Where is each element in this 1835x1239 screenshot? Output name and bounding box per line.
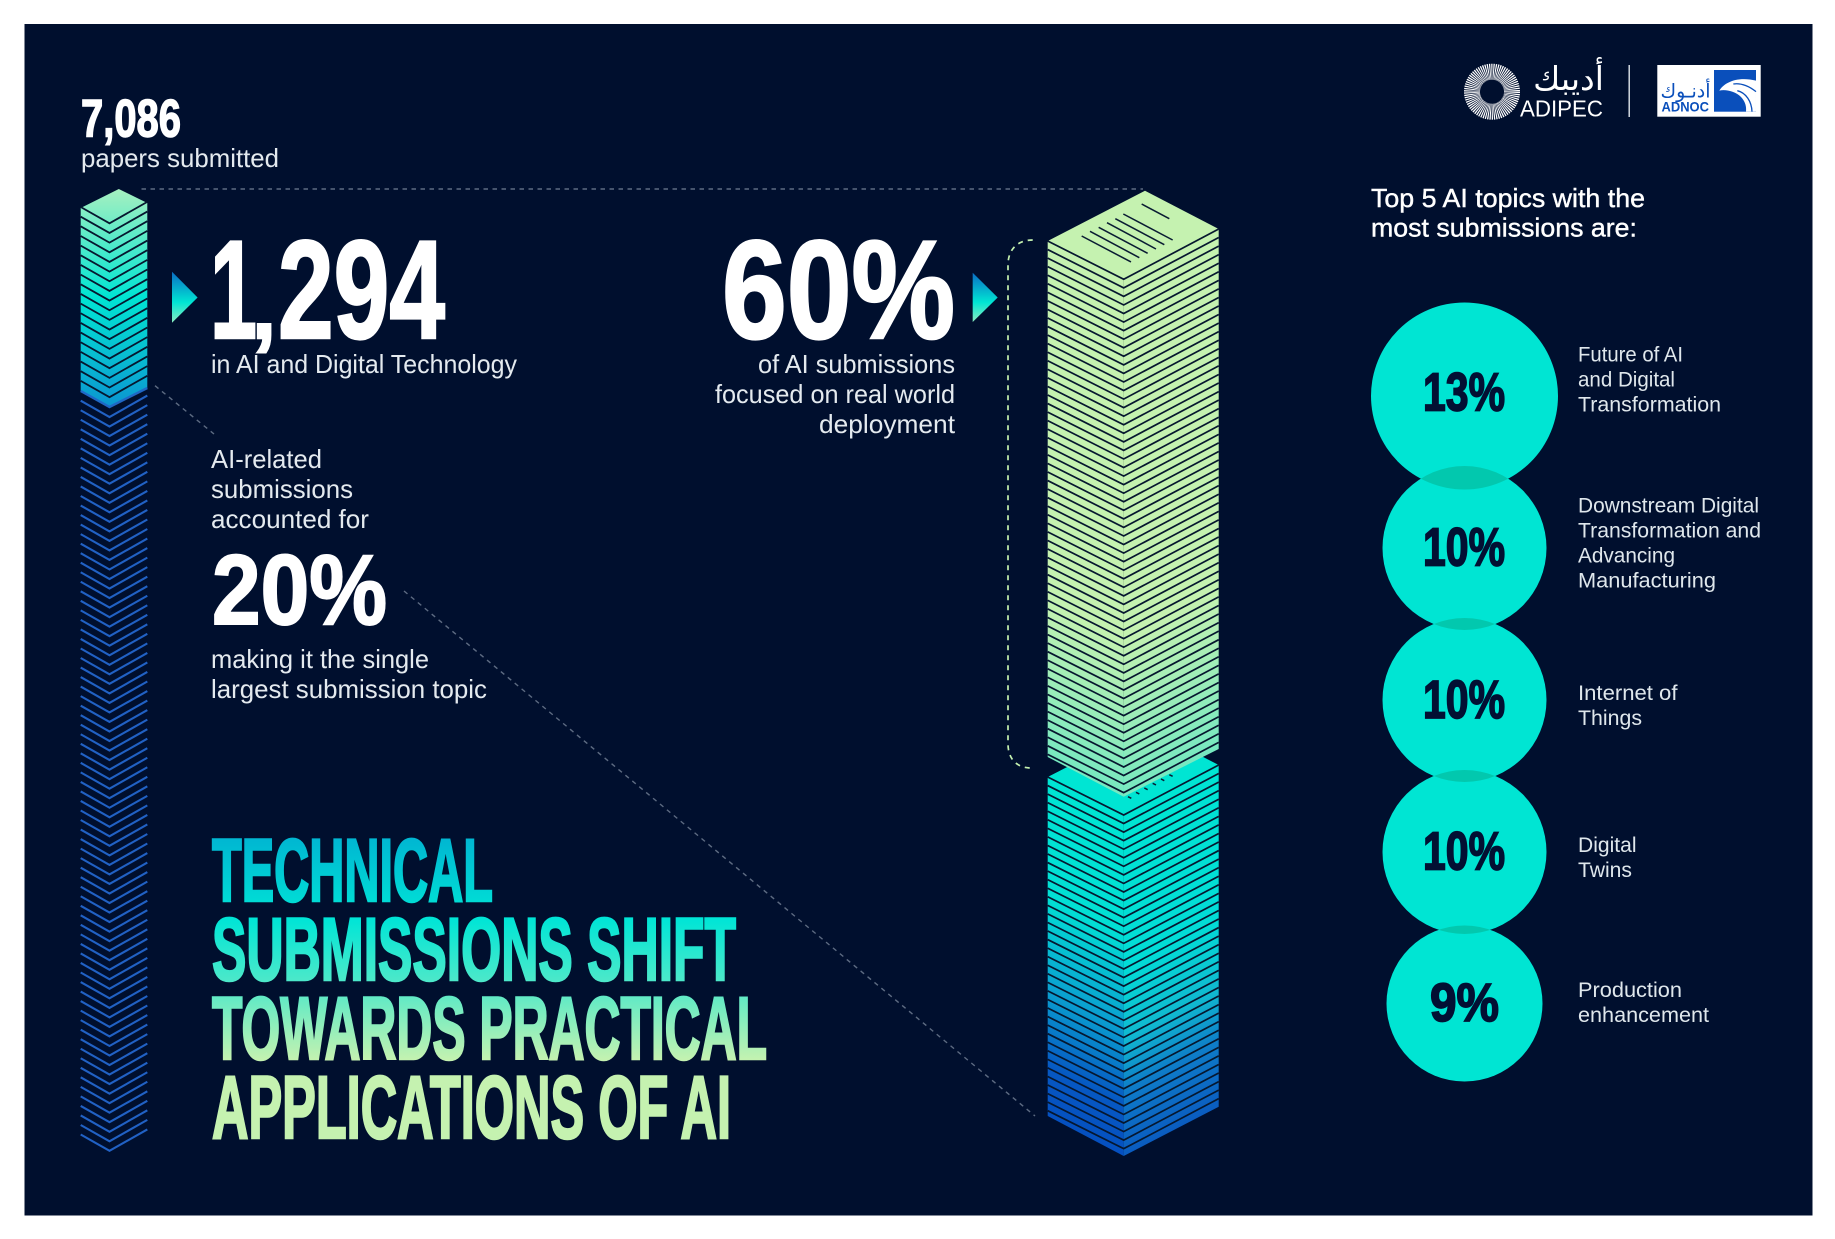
topic 5: 9% Production enhancement: Production <box>1578 978 1682 1002</box>
topic 2: 10% Downstream Digital Transformation and Advancing Manufacturing: 10% <box>1423 518 1505 578</box>
bracket: 60% span <box>1008 240 1033 768</box>
lower segment: other AI submissions <box>1048 727 1219 1156</box>
topic 2: 10% Downstream Digital Transformation and Advancing Manufacturing: Manufacturing <box>1578 569 1716 593</box>
stat: 1,294 in AI and Digital Technology: , <box>252 256 276 358</box>
stat: 1,294 in AI and Digital Technology: in AI and Digital Technology <box>211 349 517 379</box>
arrow: to 1,294 <box>172 272 198 323</box>
stat: AI-related 20%: submissions <box>211 474 353 504</box>
stat: 60% real world deployment: of AI submissions <box>758 349 955 379</box>
logo: ADIPEC <box>1472 57 1604 122</box>
topic 5: 9% Production enhancement: 9% <box>1430 973 1499 1033</box>
topic 3: 10% Internet of Things <box>1382 618 1678 782</box>
heading: top 5 AI topics: Top 5 AI topics with the <box>1371 183 1645 213</box>
topic 2: 10% Downstream Digital Transformation and Advancing Manufacturing <box>1382 466 1761 630</box>
topic 1: 13% Future of AI and Digital Transformation: 13% <box>1423 362 1505 422</box>
stat: AI-related 20%: largest submission topic <box>211 674 487 704</box>
topic 4: 10% Digital Twins: 10% <box>1423 822 1505 882</box>
logo: ADNOC: ADNOC <box>1662 99 1709 115</box>
topic 3: 10% Internet of Things: 10% <box>1423 670 1505 730</box>
stat: AI-related 20%: 20% <box>212 534 387 645</box>
stat: 60% real world deployment: deployment <box>819 409 956 439</box>
topic 2: 10% Downstream Digital Transformation and Advancing Manufacturing: Downstream Digital <box>1578 494 1759 518</box>
logo: ADIPEC: أديبك <box>1533 57 1604 98</box>
topic 2: 10% Downstream Digital Transformation and Advancing Manufacturing: Advancing <box>1578 544 1675 568</box>
topic 3: 10% Internet of Things: Things <box>1578 706 1642 730</box>
topic 5: 9% Production enhancement <box>1386 926 1709 1082</box>
stat: AI-related 20%: accounted for <box>211 504 369 534</box>
stat: 7,086 papers submitted: 7,086 <box>81 90 181 148</box>
stat: AI-related 20%: AI-related <box>211 444 322 474</box>
icon: sunburst <box>1472 72 1512 112</box>
heading: top 5 AI topics: most submissions are: <box>1371 212 1637 242</box>
title: APPLICATIONS OF AI <box>212 1057 731 1157</box>
topic 4: 10% Digital Twins: Digital <box>1578 833 1636 857</box>
topic 4: 10% Digital Twins: Twins <box>1578 858 1632 882</box>
logo: ADIPEC: ADIPEC <box>1520 96 1603 122</box>
stat: 60% real world deployment: 60% <box>722 211 955 368</box>
title: SUBMISSIONS SHIFT <box>212 899 736 999</box>
arrow: to bracket <box>973 273 998 322</box>
topic 1: 13% Future of AI and Digital Transformation: Transformation <box>1578 393 1721 417</box>
unfilled blue chevrons of small tower <box>81 396 147 1151</box>
topic 2: 10% Downstream Digital Transformation and Advancing Manufacturing: Transformation and <box>1578 519 1761 543</box>
topic 1: 13% Future of AI and Digital Transformation <box>1371 302 1721 490</box>
stat: 60% real world deployment: focused on real world <box>715 379 955 409</box>
seam text dashes <box>1128 775 1173 798</box>
logo divider <box>1628 65 1630 117</box>
logo: ADNOC: أدنـوك <box>1660 78 1711 102</box>
title <box>212 820 767 1157</box>
title: TOWARDS PRACTICAL <box>212 978 767 1078</box>
small stacked paper tower <box>81 189 147 1151</box>
topic 1: 13% Future of AI and Digital Transformation: and Digital <box>1578 368 1675 392</box>
stat: 7,086 papers submitted: papers submitted <box>81 143 279 173</box>
stat: 60% real world deployment <box>715 211 956 439</box>
icon: falcon <box>1719 79 1756 112</box>
topic 1: 13% Future of AI and Digital Transformation: Future of AI <box>1578 343 1683 367</box>
stat: AI-related 20%: making it the single <box>211 644 429 674</box>
logo: ADNOC <box>1657 65 1761 117</box>
icon: page text lines <box>1082 204 1173 262</box>
large stacked paper tower <box>1048 191 1219 1156</box>
upper segment: real world deployment <box>1048 191 1219 797</box>
filled AI segment of small tower <box>81 189 147 408</box>
topic 4: 10% Digital Twins <box>1382 770 1636 934</box>
stat: AI-related 20% <box>211 444 487 704</box>
topic 3: 10% Internet of Things: Internet of <box>1578 681 1678 705</box>
heading: top 5 AI topics <box>1371 183 1645 242</box>
stat: 7,086 papers submitted <box>81 90 279 173</box>
stat: 1,294 in AI and Digital Technology: 1 <box>210 211 257 368</box>
topic 5: 9% Production enhancement: enhancement <box>1578 1003 1709 1027</box>
title: TECHNICAL <box>212 820 493 920</box>
stat: 1,294 in AI and Digital Technology: 294 <box>278 211 445 368</box>
leader lines <box>142 189 1143 1116</box>
